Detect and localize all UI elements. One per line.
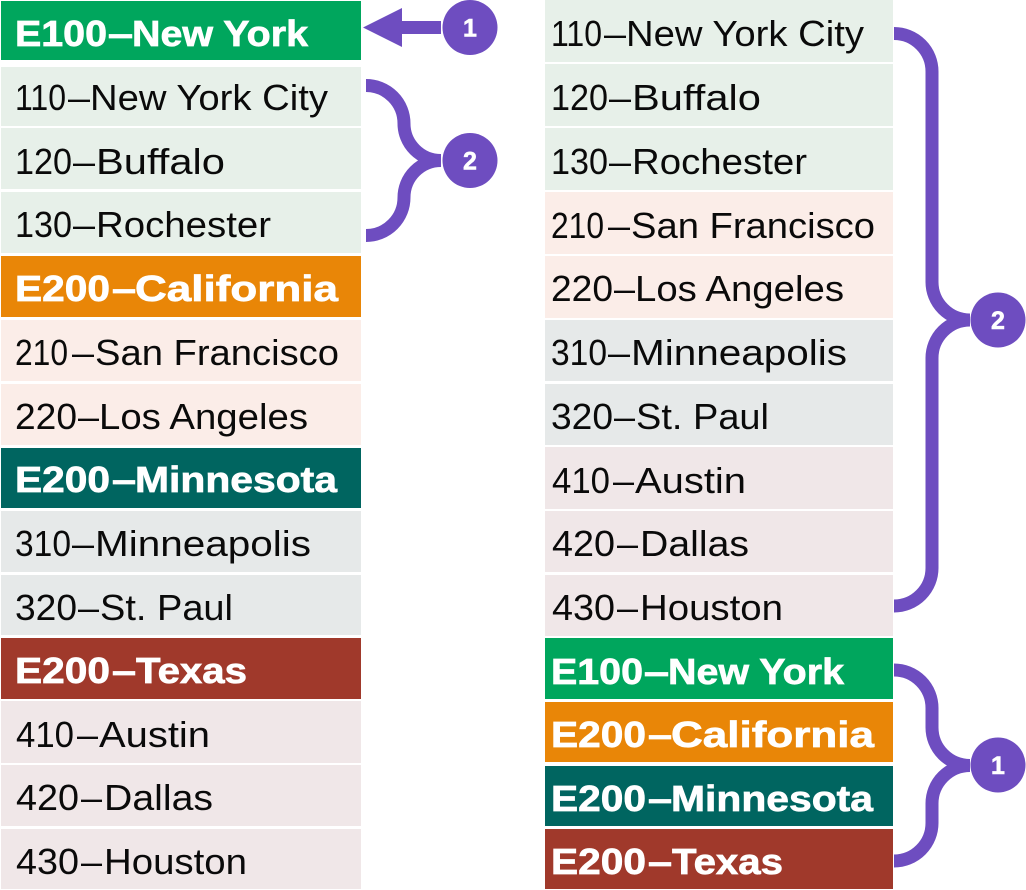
row: 220 Los Angeles: 220	[15, 396, 77, 437]
row: 410 Austin	[1, 701, 361, 763]
row: 130 Rochester: 130	[15, 204, 72, 245]
row: 210 San Francisco: 210	[15, 332, 68, 373]
row: 310 Minneapolis	[545, 320, 893, 381]
header: E200 Minnesota	[1, 448, 361, 508]
row: 130 Rochester: Rochester	[632, 141, 807, 182]
row: 320 St. Paul: —	[614, 396, 635, 437]
header: E200 California: California	[671, 714, 875, 755]
row: 110 New York City: New York City	[626, 13, 864, 54]
header: E200 California: E200	[551, 714, 646, 755]
row: 310 Minneapolis	[1, 511, 361, 572]
row: 320 St. Paul	[1, 575, 361, 635]
header: E100 New York: New York	[132, 13, 309, 54]
header: E200 California: —	[113, 268, 135, 309]
header: E200 Minnesota: Minnesota	[671, 778, 874, 819]
header: E200 Texas: —	[649, 841, 671, 882]
row: 220 Los Angeles: —	[78, 396, 99, 437]
row: 110 New York City	[545, 0, 893, 62]
header: E200 Minnesota: —	[113, 459, 135, 500]
row: 410 Austin: Austin	[635, 460, 746, 501]
row: 120 Buffalo: 120	[15, 141, 72, 182]
bracket with badge 1	[894, 670, 1026, 861]
row: 310 Minneapolis: Minneapolis	[631, 332, 847, 373]
large bracket with badge 2	[894, 34, 1026, 606]
row: 410 Austin: Austin	[99, 714, 210, 755]
header: E100 New York: —	[109, 13, 132, 54]
row: 120 Buffalo: 120	[551, 77, 608, 118]
row: 320 St. Paul: 320	[551, 396, 613, 437]
row: 430 Houston	[545, 575, 893, 636]
header: E100 New York	[1, 1, 361, 60]
row: 120 Buffalo: —	[73, 141, 95, 182]
header: E100 New York: —	[645, 651, 668, 692]
row: 410 Austin: —	[77, 714, 98, 755]
row: 220 Los Angeles	[545, 256, 893, 318]
row: 120 Buffalo	[545, 64, 893, 126]
bracket with badge 1: 1	[991, 752, 1005, 780]
row: 120 Buffalo: —	[609, 77, 631, 118]
bracket with badge 2	[366, 86, 498, 236]
row: 310 Minneapolis: Minneapolis	[95, 523, 311, 564]
row: 420 Dallas: —	[617, 523, 638, 564]
row: 310 Minneapolis: —	[608, 332, 630, 373]
row: 210 San Francisco: —	[72, 332, 94, 373]
row: 220 Los Angeles	[1, 384, 361, 445]
row: 410 Austin: 410	[552, 460, 610, 501]
row: 420 Dallas: 420	[552, 523, 615, 564]
header: E200 Texas	[1, 638, 361, 699]
header: E200 Minnesota: E200	[15, 459, 110, 500]
arrow with badge 1: 1	[463, 14, 477, 42]
row: 420 Dallas	[545, 511, 893, 572]
row: 430 Houston: Houston	[104, 841, 247, 882]
header: E200 Texas: —	[113, 650, 135, 691]
row: 430 Houston: Houston	[640, 587, 783, 628]
header: E100 New York: E100	[551, 651, 643, 692]
row: 210 San Francisco: —	[608, 205, 630, 246]
header: E200 California: E200	[15, 268, 110, 309]
row: 410 Austin	[545, 447, 893, 509]
row: 220 Los Angeles: 220	[551, 268, 613, 309]
row: 420 Dallas: 420	[16, 777, 79, 818]
panel: list sorted by level	[545, 0, 893, 889]
header: E200 Minnesota: Minnesota	[135, 459, 338, 500]
header: E200 Texas: Texas	[672, 841, 783, 882]
large bracket with badge 2: 2	[991, 307, 1005, 335]
row: 410 Austin: 410	[16, 714, 74, 755]
bracket with badge 2: 2	[463, 148, 477, 176]
row: 210 San Francisco	[545, 192, 893, 254]
row: 110 New York City: —	[68, 77, 90, 118]
header: E200 Texas	[545, 829, 893, 889]
row: 430 Houston: 430	[552, 587, 615, 628]
row: 430 Houston: 430	[16, 841, 79, 882]
row: 320 St. Paul	[545, 384, 893, 445]
row: 320 St. Paul: 320	[15, 587, 77, 628]
row: 110 New York City: 110	[15, 77, 66, 118]
row: 110 New York City	[1, 67, 361, 126]
row: 430 Houston	[1, 829, 361, 889]
row: 320 St. Paul: —	[78, 587, 99, 628]
row: 110 New York City: New York City	[90, 77, 328, 118]
row: 110 New York City: 110	[551, 13, 602, 54]
row: 430 Houston: —	[81, 841, 102, 882]
header: E200 California: California	[135, 268, 339, 309]
arrow with badge 1	[363, 0, 498, 55]
row: 130 Rochester: —	[609, 141, 631, 182]
row: 130 Rochester: —	[73, 204, 95, 245]
row: 120 Buffalo: Buffalo	[632, 77, 761, 118]
header: E200 Minnesota: —	[649, 778, 671, 819]
row: 210 San Francisco: San Francisco	[95, 332, 339, 373]
row: 210 San Francisco: 210	[551, 205, 604, 246]
row: 310 Minneapolis: 310	[551, 332, 607, 373]
row: 130 Rochester	[545, 128, 893, 190]
header: E200 Texas: Texas	[136, 650, 247, 691]
panel: grouped list by state	[1, 1, 361, 889]
row: 130 Rochester: 130	[551, 141, 608, 182]
row: 210 San Francisco	[1, 320, 361, 381]
row: 120 Buffalo: Buffalo	[96, 141, 225, 182]
header: E200 Minnesota: E200	[551, 778, 646, 819]
row: 220 Los Angeles: Los Angeles	[99, 396, 308, 437]
row: 310 Minneapolis: 310	[15, 523, 71, 564]
header: E200 California: —	[649, 714, 671, 755]
row: 320 St. Paul: St. Paul	[100, 587, 233, 628]
row: 310 Minneapolis: —	[72, 523, 94, 564]
row: 420 Dallas	[1, 765, 361, 826]
row: 420 Dallas: Dallas	[640, 523, 749, 564]
row: 210 San Francisco: San Francisco	[631, 205, 875, 246]
row: 410 Austin: —	[613, 460, 634, 501]
header: E100 New York	[545, 638, 893, 699]
header: E200 Minnesota	[545, 766, 893, 826]
row: 430 Houston: —	[617, 587, 638, 628]
row: 110 New York City: —	[604, 13, 626, 54]
row: 220 Los Angeles: —	[614, 268, 635, 309]
row: 320 St. Paul: St. Paul	[636, 396, 769, 437]
row: 130 Rochester: Rochester	[96, 204, 271, 245]
header: E200 Texas: E200	[551, 841, 646, 882]
header: E200 California	[545, 702, 893, 762]
row: 120 Buffalo	[1, 128, 361, 189]
row: 220 Los Angeles: Los Angeles	[635, 268, 844, 309]
row: 420 Dallas: —	[81, 777, 102, 818]
header: E100 New York: New York	[668, 651, 845, 692]
row: 130 Rochester	[1, 192, 361, 253]
header: E200 Texas: E200	[15, 650, 110, 691]
header: E100 New York: E100	[15, 13, 107, 54]
row: 420 Dallas: Dallas	[104, 777, 213, 818]
header: E200 California	[1, 256, 361, 317]
